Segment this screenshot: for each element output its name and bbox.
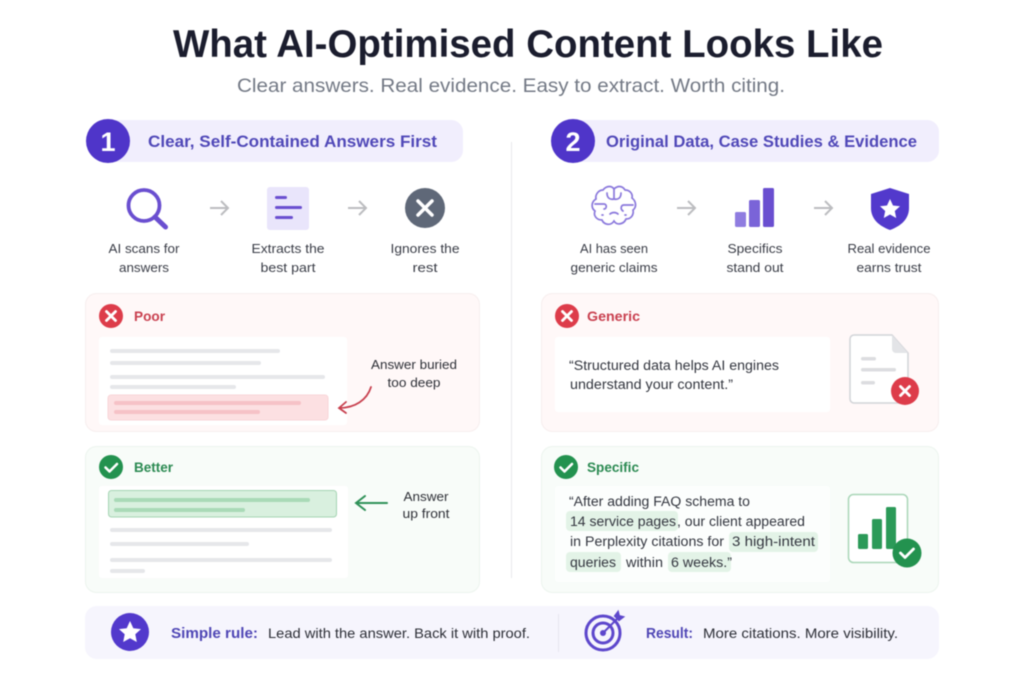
callout: answer buried: Answer buried <box>371 357 457 372</box>
quote: specific claim: within <box>625 555 663 570</box>
document mockup: answer first <box>99 486 348 578</box>
arrow: scan to extract <box>210 201 228 215</box>
heading: specific: Specific <box>587 459 639 475</box>
column divider <box>510 142 512 578</box>
label: extracts: best part <box>260 261 316 275</box>
icon: shield with star <box>871 188 909 230</box>
quote: specific claim <box>555 486 830 582</box>
section 2 heading: Original Data, Case Studies & Evidence <box>606 132 917 151</box>
label: AI scans: AI scans for <box>108 242 180 256</box>
quote: generic claim <box>555 337 830 412</box>
icon: red cross <box>99 304 123 328</box>
quote: specific claim: 14 service pages <box>570 514 676 529</box>
result text <box>646 625 898 642</box>
label: real evidence <box>848 242 931 275</box>
label: AI has seen: generic claims <box>570 261 658 275</box>
panel: specific <box>542 446 938 592</box>
section 1 heading <box>86 119 463 163</box>
quote: specific claim: 6 weeks.” <box>671 555 732 570</box>
panel: generic <box>542 294 938 432</box>
label: specifics <box>726 242 784 275</box>
simple rule text: Lead with the answer. Back it with proof. <box>268 625 530 641</box>
result text: Result: <box>646 626 693 642</box>
label: AI scans: answers <box>119 261 169 275</box>
icon: extracted text <box>267 187 309 230</box>
callout: answer buried <box>371 357 457 390</box>
section 1 heading: 1 <box>100 127 116 157</box>
result text: More citations. More visibility. <box>703 625 898 641</box>
arrow: generic to specifics <box>677 201 695 215</box>
title: What AI-Optimised Content Looks Like <box>173 23 883 66</box>
icon: green check <box>99 455 123 479</box>
label: extracts <box>252 242 325 275</box>
label: AI scans <box>108 242 180 275</box>
section 1 heading: Clear, Self-Contained Answers First <box>148 132 437 151</box>
quote: specific claim: “After adding FAQ schema to <box>569 494 750 509</box>
label: AI has seen <box>570 242 658 275</box>
arrow: to buried answer <box>339 387 371 413</box>
panel: better <box>86 446 480 592</box>
panel: poor <box>86 294 480 432</box>
simple rule text: Simple rule: <box>171 626 258 642</box>
document mockup: buried answer <box>99 337 347 425</box>
label: ignores: Ignores the <box>390 242 460 256</box>
quote: specific claim: , our client appeared <box>677 514 805 529</box>
icon: red cross <box>555 304 579 328</box>
label: specifics: stand out <box>726 261 784 275</box>
quote: specific claim: queries <box>570 555 616 570</box>
heading: poor: Poor <box>134 308 166 324</box>
icon: document with cross <box>850 335 919 405</box>
callout: answer buried: too deep <box>388 375 440 390</box>
label: real evidence: Real evidence <box>848 242 931 256</box>
flow 1: how AI reads answers <box>108 187 460 275</box>
flow 2: why evidence matters <box>570 186 931 275</box>
label: real evidence: earns trust <box>856 261 922 275</box>
icon: star badge <box>111 613 149 651</box>
icon: chart with check <box>848 494 922 568</box>
subtitle: Clear answers. Real evidence. Easy to extract. Worth citing. <box>237 75 785 97</box>
quote: generic claim: “Structured data helps AI engines <box>569 358 779 373</box>
arrow: to answer <box>356 496 387 510</box>
separator <box>558 614 560 652</box>
label: ignores: rest <box>412 261 438 275</box>
label: AI has seen: AI has seen <box>580 242 648 256</box>
section 2 heading: 2 <box>565 127 581 157</box>
quote: specific claim: in Perplexity citations for <box>570 534 725 549</box>
heading: better: Better <box>134 459 174 475</box>
label: specifics: Specifics <box>728 242 782 256</box>
callout: answer up front: Answer <box>404 489 449 504</box>
arrow: extract to ignore <box>348 201 366 215</box>
icon: target with arrow <box>586 612 623 650</box>
callout: answer up front <box>402 489 450 521</box>
quote: specific claim: 3 high-intent <box>732 534 815 549</box>
heading: generic: Generic <box>587 308 640 324</box>
icon: ignored cross <box>405 188 445 228</box>
bottom rule bar <box>85 606 939 659</box>
icon: rising bars <box>735 188 774 227</box>
label: ignores <box>390 242 460 275</box>
icon: brain <box>592 186 636 224</box>
label: extracts: Extracts the <box>252 242 325 256</box>
simple rule text <box>171 625 530 642</box>
arrow: specifics to evidence <box>814 201 832 215</box>
quote: generic claim: understand your content.” <box>570 377 733 392</box>
icon: magnifying glass <box>128 190 166 227</box>
callout: answer up front: up front <box>402 506 450 521</box>
section 2 heading <box>551 119 939 163</box>
icon: green check <box>554 455 578 479</box>
